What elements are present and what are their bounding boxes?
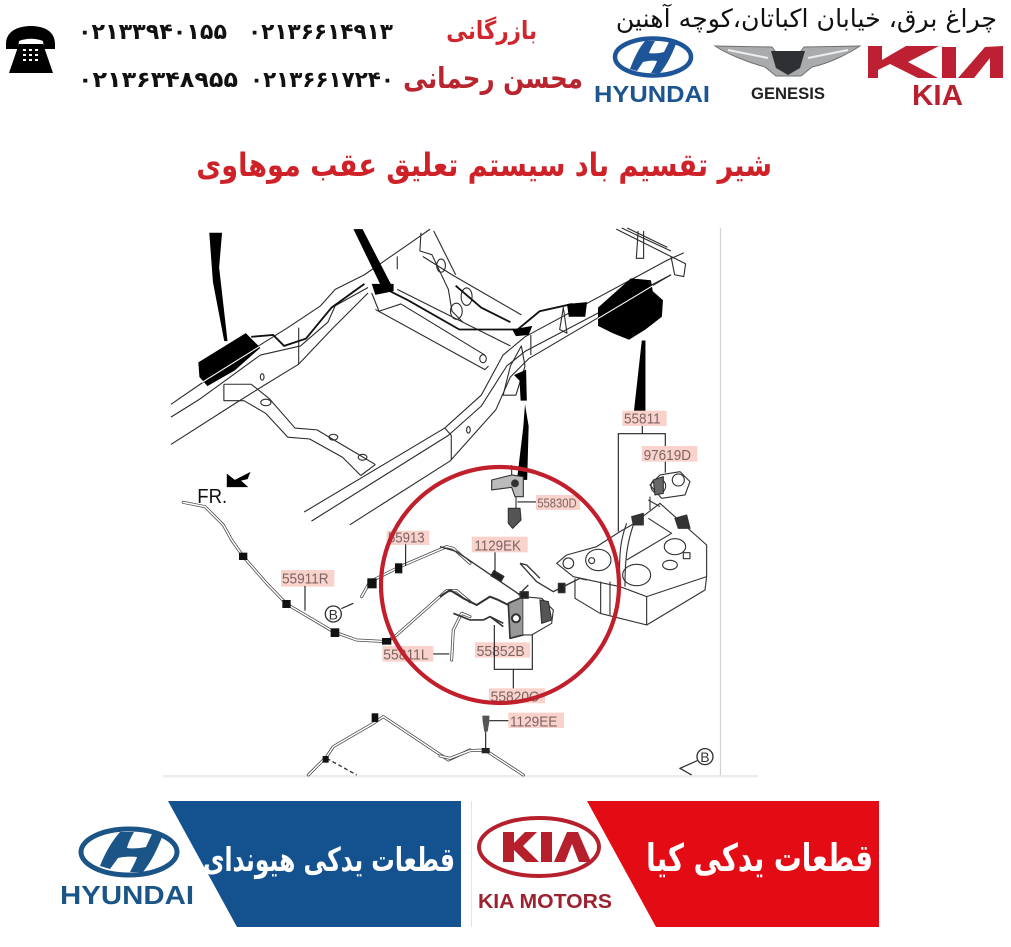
logo: hyundai header <box>594 38 710 107</box>
label 55811: 55811 <box>624 411 661 428</box>
logo: genesis: GENESIS <box>751 84 825 103</box>
diagram: chassis frame <box>171 228 686 525</box>
diagram: valve and air tank <box>440 411 713 775</box>
label 55913 <box>387 530 429 566</box>
phone numbers <box>78 20 394 93</box>
highlight: red circle <box>381 467 619 703</box>
label 1129EE <box>482 713 564 748</box>
callout circle letter B left: B <box>329 606 338 622</box>
wiring along chassis <box>251 284 572 346</box>
tubes <box>183 502 470 775</box>
callout circle letter B left <box>325 603 353 622</box>
height sensor <box>492 465 523 528</box>
logo: hyundai banner <box>60 829 194 910</box>
black pointer spikes <box>209 229 645 480</box>
label 55913: 55913 <box>388 530 425 547</box>
logo: hyundai header: HYUNDAI <box>594 81 710 107</box>
logo: hyundai banner: HYUNDAI <box>60 880 194 910</box>
banner text kia: قطعات یدکی کیا <box>646 836 873 880</box>
black air spring right <box>567 278 663 340</box>
label 97619D <box>642 446 697 473</box>
label 1129EE: 1129EE <box>510 713 557 730</box>
distribution valve <box>440 547 587 638</box>
banner: hyundai parts <box>60 801 461 927</box>
label 55820C: 55820C <box>491 689 539 706</box>
phone numbers: ۰۲۱۳۶۶۱۴۹۱۳ <box>248 20 394 45</box>
label 55811 <box>618 411 667 532</box>
FR label: FR. <box>197 485 227 508</box>
label 1129EK: 1129EK <box>474 537 521 554</box>
front arrow <box>227 472 251 487</box>
logo: genesis <box>715 46 860 103</box>
phone numbers: ۰۲۱۳۶۳۴۸۹۵۵ <box>78 68 238 93</box>
tube clips <box>239 553 402 763</box>
logo: kia new <box>868 46 1003 112</box>
icon: telephone <box>6 26 55 73</box>
white line across springs <box>202 286 653 382</box>
air tank <box>557 500 707 625</box>
label 55911R: 55911R <box>282 571 329 588</box>
label 55830D: 55830D <box>537 496 577 510</box>
black air spring left <box>198 333 260 386</box>
logo: kia banner: KIA MOTORS <box>478 890 612 913</box>
callout circle letter B right: B <box>700 749 710 765</box>
logo: kia banner <box>478 818 612 913</box>
banner: kia parts <box>472 801 879 927</box>
diagram: left air lines <box>183 502 470 775</box>
seller name <box>403 15 583 96</box>
title: شیر تقسیم باد سیستم تعلیق عقب موهاوی <box>196 146 772 184</box>
compressor <box>632 472 690 528</box>
label 1129EK <box>472 537 528 573</box>
black clusters <box>372 284 532 401</box>
phone numbers: ۰۲۱۳۶۶۱۷۲۴۰ <box>250 68 394 93</box>
seller name: محسن رحمانی <box>403 62 583 96</box>
label 55852B <box>475 625 532 689</box>
seller name: بازرگانی <box>446 15 537 45</box>
lower tube with bolt <box>440 748 523 775</box>
label 55852B: 55852B <box>477 643 525 660</box>
phone numbers: ۰۲۱۳۳۹۴۰۱۵۵ <box>78 20 227 45</box>
blue panel <box>168 801 461 927</box>
chassis rails <box>171 228 686 525</box>
red panel <box>587 801 879 927</box>
banner text hyundai: قطعات یدکی هیوندای <box>203 840 455 879</box>
label 55830D <box>517 495 580 510</box>
logo: kia new: KIA <box>912 80 963 112</box>
label 55811L: 55811L <box>383 646 429 663</box>
label 97619D: 97619D <box>644 447 691 464</box>
label 55911R <box>281 570 334 611</box>
address: چراغ برق، خیابان اکباتان،کوچه آهنین <box>616 3 997 34</box>
callout circle letter B right <box>680 749 713 775</box>
diagram: panel frame lines <box>163 228 758 778</box>
